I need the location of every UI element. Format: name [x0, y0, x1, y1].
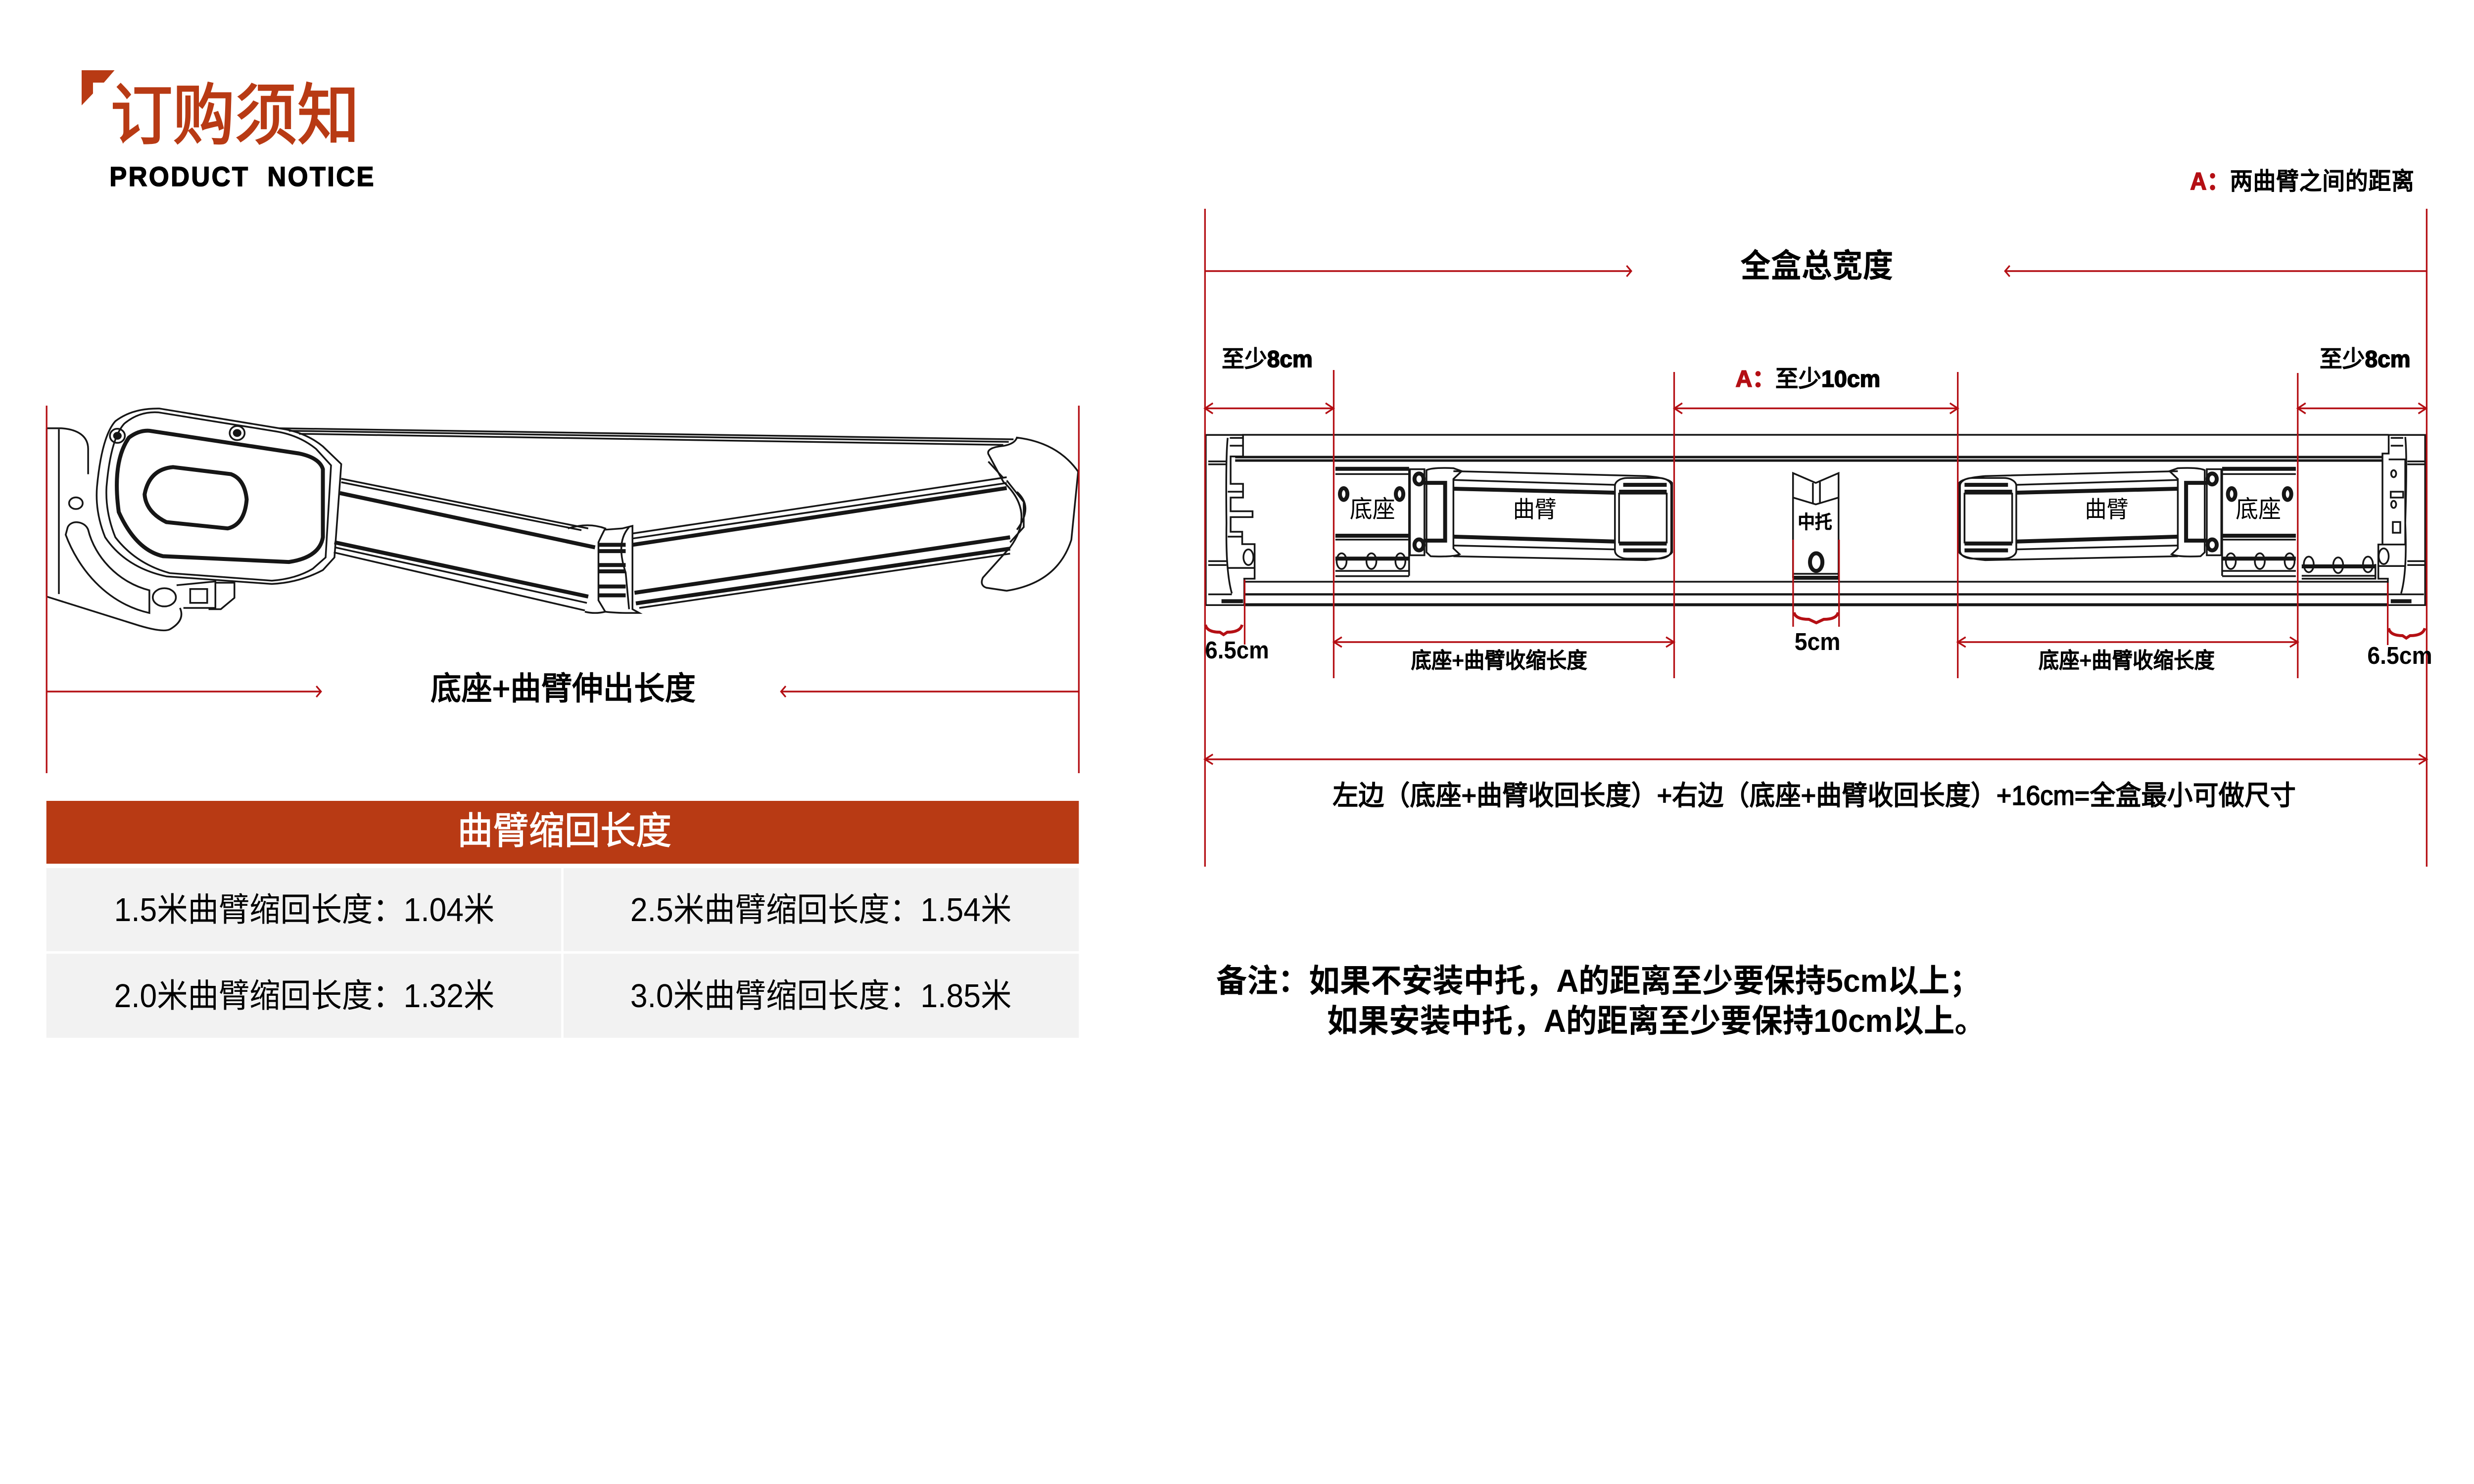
subtitle: PRODUCT NOTICE [109, 161, 374, 192]
part label: right arm: 曲臂 [2085, 497, 2129, 522]
cell: 2.5m: 2.5米曲臂缩回长度：1.54米 [630, 891, 1011, 928]
cell: 3.0m: 3.0米曲臂缩回长度：1.85米 [630, 977, 1011, 1014]
right retract length label: 底座+曲臂收缩长度 [2039, 649, 2215, 673]
part label: center support: 中托 [1798, 512, 1832, 532]
extended arm drawing [47, 409, 1078, 630]
arrow: left 8cm [1205, 403, 1333, 414]
right base and arm [1959, 468, 2296, 576]
note line 2: 如果安装中托，A的距离至少要保持10cm以上。 [1327, 1003, 1986, 1039]
total width label: 全盒总宽度 [1740, 247, 1893, 284]
6.5cm left marker [1205, 580, 1269, 664]
6.5cm left marker: 6.5cm [1205, 637, 1269, 664]
arrow: extension right [781, 686, 1079, 697]
left base and arm [1335, 468, 1672, 576]
arrow: extension left [47, 686, 321, 697]
table header text: 曲臂缩回长度 [457, 809, 671, 852]
6.5cm right marker: 6.5cm [2367, 643, 2432, 669]
left retract length label: 底座+曲臂收缩长度 [1411, 649, 1587, 673]
part label: left arm: 曲臂 [1513, 497, 1557, 522]
cell: 1.5m: 1.5米曲臂缩回长度：1.04米 [114, 891, 494, 928]
extension span right line [1078, 406, 1080, 773]
6.5cm right marker [2367, 583, 2432, 669]
center support bracket [1793, 473, 1839, 578]
title block [82, 70, 374, 192]
part label: left base: 底座 [1350, 496, 1395, 523]
5cm center marker [1793, 540, 1841, 655]
left end cap [1206, 435, 1255, 605]
cell: 2.0m [47, 954, 561, 1038]
title: 订购须知 [110, 78, 359, 153]
minimum size formula: 左边（底座+曲臂收回长度）+右边（底座+曲臂收回长度）+16cm=全盒最小可做尺寸 [1332, 781, 2296, 811]
extra right mounting bracket [2302, 556, 2376, 579]
panel: retracted box diagram [1205, 168, 2432, 867]
cell: 2.0m: 2.0米曲臂缩回长度：1.32米 [114, 977, 494, 1014]
arrow: right 8cm [2298, 403, 2426, 414]
arrow: center 10cm [1674, 403, 1958, 414]
legend A definition: A：两曲臂之间的距离 [2190, 168, 2414, 195]
extension label: 底座+曲臂伸出长度 [430, 671, 696, 706]
A minimum 10cm label: A：至少10cm [1736, 366, 1880, 392]
arrow: total width left [1205, 266, 1631, 277]
title corner mark [82, 70, 115, 105]
arrow: right retract length [1958, 637, 2298, 647]
arrow: left retract length [1334, 637, 1674, 647]
left minimum 8cm label: 至少8cm [1222, 346, 1313, 372]
right end cap [2379, 435, 2425, 605]
right minimum 8cm label: 至少8cm [2320, 346, 2411, 372]
note text [1216, 963, 1986, 1039]
box rails [1230, 435, 2389, 604]
arrow: total width right [2005, 266, 2426, 277]
table header bar [47, 801, 1079, 864]
note line 1: 备注：如果不安装中托，A的距离至少要保持5cm以上； [1216, 963, 1981, 999]
cell: 3.0m [564, 954, 1079, 1038]
cell: 1.5m [47, 868, 561, 951]
panel: arm retraction length table [47, 801, 1079, 1038]
5cm center marker: 5cm [1795, 629, 1841, 655]
total width extent lines [1205, 209, 2426, 867]
extension span left line [46, 406, 48, 773]
panel: extended arm diagram [47, 406, 1079, 773]
arrow: full minimum size [1205, 754, 2426, 764]
dimension tick lines [1333, 370, 2298, 678]
part label: right base: 底座 [2236, 496, 2281, 523]
cell: 2.5m [564, 868, 1079, 951]
